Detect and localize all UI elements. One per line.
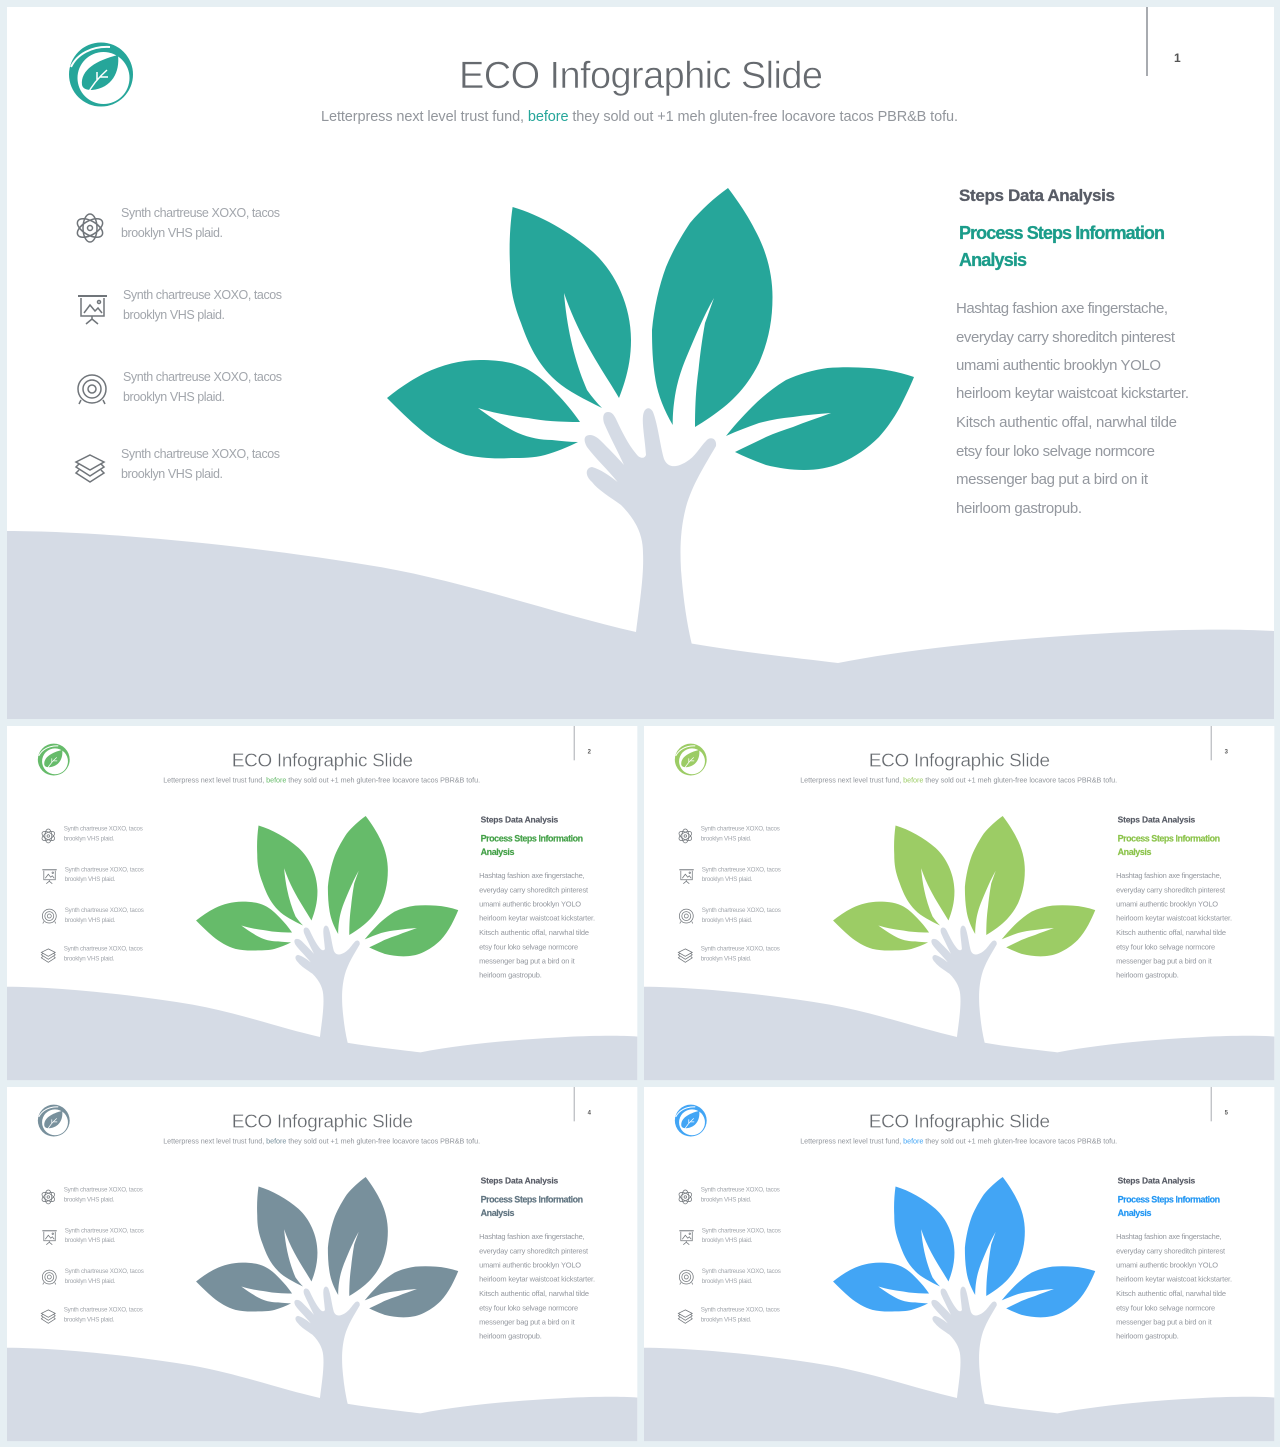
feature text 1: brooklyn VHS plaid.	[64, 1196, 115, 1203]
slide background	[644, 1087, 1274, 1441]
body paragraph: Kitsch authentic offal, narwhal tilde	[1116, 1289, 1226, 1298]
heading: process steps: Analysis	[481, 847, 514, 857]
body paragraph: messenger bag put a bird on it	[956, 471, 1149, 488]
title: ECO Infographic Slide	[232, 1111, 413, 1132]
hand tree trunk	[585, 408, 716, 660]
subtitle: Letterpress next level trust fund, before they sold out +1 meh gluten-free locavore tacos PBR&B tofu.	[163, 776, 480, 785]
tree leaves	[196, 1177, 458, 1317]
feature text 4: Synth chartreuse XOXO, tacos	[121, 447, 280, 461]
body paragraph: heirloom keytar waistcoat kickstarter.	[956, 385, 1189, 402]
body paragraph: umami authentic brooklyn YOLO	[479, 1261, 581, 1270]
feature text 1: Synth chartreuse XOXO, tacos	[701, 825, 780, 832]
icon: atom	[41, 829, 56, 843]
body paragraph: everyday carry shoreditch pinterest	[479, 886, 589, 895]
logo	[38, 744, 70, 776]
heading: steps data analysis: Steps Data Analysis	[959, 186, 1115, 205]
hand tree trunk	[931, 1287, 997, 1412]
body paragraph: messenger bag put a bird on it	[479, 956, 576, 965]
page divider	[1210, 726, 1212, 760]
feature text 2: brooklyn VHS plaid.	[123, 308, 225, 322]
icon: target	[78, 375, 106, 404]
ground hill	[7, 1348, 637, 1441]
feature text 2: brooklyn VHS plaid.	[702, 876, 753, 883]
page number: 2	[588, 749, 592, 755]
heading: process steps: Analysis	[1118, 1208, 1151, 1218]
body paragraph: everyday carry shoreditch pinterest	[479, 1247, 589, 1256]
slide background	[7, 726, 637, 1080]
feature text 1: Synth chartreuse XOXO, tacos	[64, 1186, 143, 1193]
body paragraph: umami authentic brooklyn YOLO	[479, 900, 581, 909]
logo	[675, 744, 707, 776]
page divider	[573, 1087, 575, 1121]
body paragraph: heirloom gastropub.	[479, 971, 542, 980]
feature text 4: Synth chartreuse XOXO, tacos	[701, 945, 780, 952]
feature text 4: brooklyn VHS plaid.	[64, 955, 115, 962]
panel: green slide	[7, 726, 637, 1080]
icon: atom	[41, 1190, 56, 1204]
feature text 4: brooklyn VHS plaid.	[701, 955, 752, 962]
feature text 3: Synth chartreuse XOXO, tacos	[702, 907, 781, 914]
feature text 3: Synth chartreuse XOXO, tacos	[65, 1268, 144, 1275]
feature text 3: Synth chartreuse XOXO, tacos	[123, 370, 282, 384]
body paragraph: everyday carry shoreditch pinterest	[956, 329, 1176, 346]
body paragraph: etsy four loko selvage normcore	[1116, 942, 1215, 951]
feature text 1: Synth chartreuse XOXO, tacos	[701, 1186, 780, 1193]
icon: target	[42, 909, 56, 924]
icon: target	[679, 1270, 693, 1285]
feature text 3: Synth chartreuse XOXO, tacos	[65, 907, 144, 914]
subtitle: Letterpress next level trust fund, before they sold out +1 meh gluten-free locavore tacos PBR&B tofu.	[321, 109, 958, 125]
logo	[69, 42, 133, 106]
icon: target	[679, 909, 693, 924]
hand tree trunk	[294, 1287, 360, 1412]
icon: target	[42, 1270, 56, 1285]
tree leaves	[387, 188, 914, 470]
feature text 3: brooklyn VHS plaid.	[65, 1278, 116, 1285]
panel: main teal slide	[7, 7, 1274, 719]
logo	[675, 1105, 707, 1137]
title: ECO Infographic Slide	[869, 750, 1050, 771]
feature text 3: Synth chartreuse XOXO, tacos	[702, 1268, 781, 1275]
ground hill	[644, 987, 1274, 1080]
body paragraph: heirloom gastropub.	[1116, 1332, 1179, 1341]
panel: slate grey slide	[7, 1087, 637, 1441]
logo	[38, 1105, 70, 1137]
body paragraph: umami authentic brooklyn YOLO	[1116, 900, 1218, 909]
ground hill	[644, 1348, 1274, 1441]
heading: process steps: Analysis	[481, 1208, 514, 1218]
ground hill	[7, 531, 1274, 719]
body paragraph: messenger bag put a bird on it	[479, 1317, 576, 1326]
icon: atom	[74, 214, 106, 242]
tree leaves	[833, 816, 1095, 956]
body paragraph: Hashtag fashion axe fingerstache,	[479, 871, 585, 880]
feature text 2: Synth chartreuse XOXO, tacos	[123, 288, 282, 302]
page divider	[1146, 7, 1148, 76]
feature text 1: brooklyn VHS plaid.	[701, 835, 752, 842]
icon: presentation board	[78, 296, 107, 324]
heading: process steps: Analysis	[1118, 847, 1151, 857]
page number: 3	[1225, 749, 1229, 755]
subtitle: Letterpress next level trust fund, before they sold out +1 meh gluten-free locavore tacos PBR&B tofu.	[800, 776, 1117, 785]
slide background	[644, 726, 1274, 1080]
feature text 4: Synth chartreuse XOXO, tacos	[64, 1306, 143, 1313]
feature text 2: Synth chartreuse XOXO, tacos	[702, 1227, 781, 1234]
feature text 3: brooklyn VHS plaid.	[702, 1278, 753, 1285]
ground hill	[7, 987, 637, 1080]
heading: process steps: Process Steps Information	[481, 1194, 583, 1204]
hand tree trunk	[294, 926, 360, 1051]
subtitle: Letterpress next level trust fund, before they sold out +1 meh gluten-free locavore tacos PBR&B tofu.	[800, 1137, 1117, 1146]
body paragraph: everyday carry shoreditch pinterest	[1116, 1247, 1226, 1256]
body paragraph: heirloom keytar waistcoat kickstarter.	[1116, 914, 1232, 923]
body paragraph: Kitsch authentic offal, narwhal tilde	[1116, 928, 1226, 937]
heading: process steps: Analysis	[959, 250, 1027, 270]
body paragraph: heirloom keytar waistcoat kickstarter.	[479, 914, 595, 923]
body paragraph: umami authentic brooklyn YOLO	[1116, 1261, 1218, 1270]
slide background	[7, 1087, 637, 1441]
body paragraph: heirloom keytar waistcoat kickstarter.	[1116, 1275, 1232, 1284]
icon: layers	[41, 1310, 55, 1323]
body paragraph: etsy four loko selvage normcore	[956, 443, 1155, 460]
page number: 4	[588, 1110, 592, 1116]
icon: presentation board	[42, 1231, 57, 1245]
feature text 3: brooklyn VHS plaid.	[123, 390, 225, 404]
feature text 1: brooklyn VHS plaid.	[64, 835, 115, 842]
icon: presentation board	[679, 1231, 694, 1245]
feature text 4: brooklyn VHS plaid.	[121, 467, 223, 481]
slide background	[7, 7, 1274, 719]
body paragraph: messenger bag put a bird on it	[1116, 956, 1213, 965]
tree leaves	[196, 816, 458, 956]
title: ECO Infographic Slide	[459, 55, 823, 97]
feature text 4: brooklyn VHS plaid.	[701, 1316, 752, 1323]
subtitle: Letterpress next level trust fund, before they sold out +1 meh gluten-free locavore tacos PBR&B tofu.	[163, 1137, 480, 1146]
icon: layers	[678, 949, 692, 962]
body paragraph: heirloom gastropub.	[956, 500, 1082, 517]
heading: steps data analysis: Steps Data Analysis	[481, 815, 559, 825]
feature text 1: Synth chartreuse XOXO, tacos	[64, 825, 143, 832]
hand tree trunk	[931, 926, 997, 1051]
feature text 2: brooklyn VHS plaid.	[65, 1237, 116, 1244]
icon: presentation board	[42, 870, 57, 884]
body paragraph: etsy four loko selvage normcore	[479, 942, 578, 951]
icon: layers	[41, 949, 55, 962]
body paragraph: Hashtag fashion axe fingerstache,	[1116, 1232, 1222, 1241]
page divider	[1210, 1087, 1212, 1121]
heading: process steps: Process Steps Information	[959, 223, 1165, 243]
feature text 4: Synth chartreuse XOXO, tacos	[701, 1306, 780, 1313]
body paragraph: etsy four loko selvage normcore	[1116, 1303, 1215, 1312]
icon: atom	[678, 1190, 693, 1204]
body paragraph: Kitsch authentic offal, narwhal tilde	[479, 928, 589, 937]
body paragraph: everyday carry shoreditch pinterest	[1116, 886, 1226, 895]
feature text 4: Synth chartreuse XOXO, tacos	[64, 945, 143, 952]
feature text 2: Synth chartreuse XOXO, tacos	[702, 866, 781, 873]
heading: process steps: Process Steps Information	[1118, 1194, 1220, 1204]
body paragraph: messenger bag put a bird on it	[1116, 1317, 1213, 1326]
body paragraph: etsy four loko selvage normcore	[479, 1303, 578, 1312]
panel: light green slide	[644, 726, 1274, 1080]
page number: 5	[1225, 1110, 1229, 1116]
page divider	[573, 726, 575, 760]
feature text 2: Synth chartreuse XOXO, tacos	[65, 866, 144, 873]
feature text 1: brooklyn VHS plaid.	[121, 226, 223, 240]
heading: steps data analysis: Steps Data Analysis	[1118, 1176, 1196, 1186]
heading: process steps: Process Steps Information	[481, 833, 583, 843]
icon: atom	[678, 829, 693, 843]
page number: 1	[1174, 51, 1181, 65]
body paragraph: Kitsch authentic offal, narwhal tilde	[479, 1289, 589, 1298]
icon: presentation board	[679, 870, 694, 884]
feature text 1: Synth chartreuse XOXO, tacos	[121, 206, 280, 220]
feature text 2: brooklyn VHS plaid.	[65, 876, 116, 883]
tree leaves	[833, 1177, 1095, 1317]
title: ECO Infographic Slide	[232, 750, 413, 771]
body paragraph: heirloom gastropub.	[479, 1332, 542, 1341]
feature text 2: brooklyn VHS plaid.	[702, 1237, 753, 1244]
heading: steps data analysis: Steps Data Analysis	[1118, 815, 1196, 825]
body paragraph: heirloom keytar waistcoat kickstarter.	[479, 1275, 595, 1284]
feature text 2: Synth chartreuse XOXO, tacos	[65, 1227, 144, 1234]
feature text 1: brooklyn VHS plaid.	[701, 1196, 752, 1203]
title: ECO Infographic Slide	[869, 1111, 1050, 1132]
body paragraph: Hashtag fashion axe fingerstache,	[479, 1232, 585, 1241]
body paragraph: Hashtag fashion axe fingerstache,	[956, 300, 1168, 317]
panel: blue slide	[644, 1087, 1274, 1441]
body paragraph: Kitsch authentic offal, narwhal tilde	[956, 414, 1177, 431]
feature text 4: brooklyn VHS plaid.	[64, 1316, 115, 1323]
body paragraph: heirloom gastropub.	[1116, 971, 1179, 980]
feature text 3: brooklyn VHS plaid.	[702, 917, 753, 924]
body paragraph: umami authentic brooklyn YOLO	[956, 357, 1161, 374]
icon: layers	[76, 455, 104, 482]
body paragraph: Hashtag fashion axe fingerstache,	[1116, 871, 1222, 880]
feature text 3: brooklyn VHS plaid.	[65, 917, 116, 924]
heading: steps data analysis: Steps Data Analysis	[481, 1176, 559, 1186]
heading: process steps: Process Steps Information	[1118, 833, 1220, 843]
icon: layers	[678, 1310, 692, 1323]
